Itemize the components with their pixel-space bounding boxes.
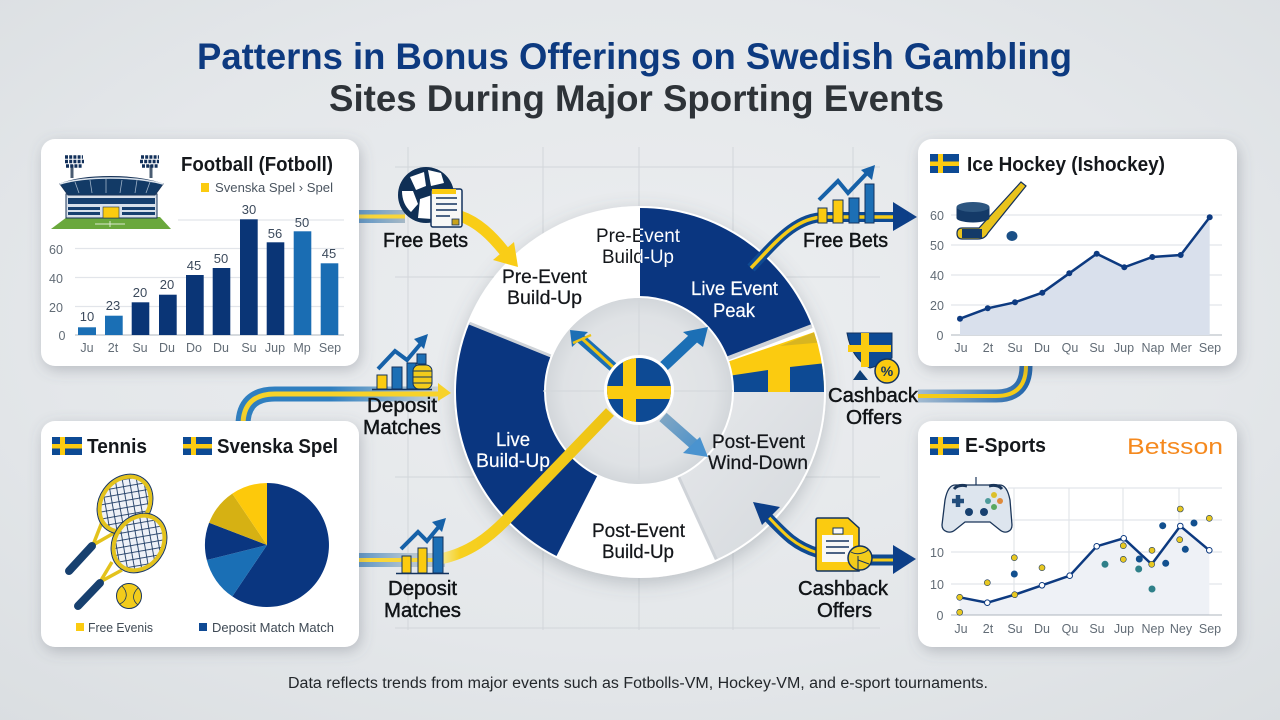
label: deposit matches (lower) [384, 578, 461, 622]
label: pre-event build-up, left [502, 267, 588, 309]
title [197, 36, 1072, 119]
label: deposit matches (lower): Matches [384, 600, 461, 622]
panel: ice hockey [918, 139, 1237, 366]
heading: tennis: Tennis [87, 436, 147, 458]
label: post-event build-up [592, 521, 686, 563]
line and scatter chart: e-sports: Nep [1142, 622, 1165, 636]
bar chart: football: Mp [293, 341, 311, 355]
line and scatter chart: e-sports: Sep [1199, 622, 1221, 636]
bar chart: football: 0 [59, 329, 66, 343]
bar chart: football [49, 202, 344, 355]
ring labels [476, 226, 808, 563]
label: cashback offers [828, 385, 919, 429]
segment: post-event wind-down [678, 392, 824, 559]
flow: free bets (top left) [359, 167, 518, 267]
icon: document with ball [816, 518, 872, 571]
flow: free bets (top right) [751, 165, 917, 268]
inner hole [545, 297, 733, 485]
label: cashback offers: Cashback [828, 385, 919, 407]
line and scatter chart: e-sports: Jup [1114, 622, 1134, 636]
label: cashback offers (lower): Offers [817, 600, 872, 622]
panel: tennis and Svenska Spel [41, 421, 359, 647]
line chart: ice hockey [930, 209, 1222, 355]
line chart: ice hockey: 40 [930, 269, 944, 283]
bar chart: football: 60 [49, 243, 63, 257]
bar chart: football: 45 [187, 258, 201, 273]
title: Patterns in Bonus Offerings on Swedish Gambling [197, 36, 1072, 77]
label: pre-event build-up, split: Build-Up [602, 247, 674, 268]
icon: flag shield with percent badge [847, 333, 899, 383]
line chart: ice hockey: Mer [1170, 341, 1192, 355]
bar chart: football: 20 [49, 301, 63, 315]
arrow: hub to north-east [663, 327, 708, 367]
legend: deposit match: Deposit Match Match [212, 621, 334, 635]
line and scatter chart: e-sports: Qu [1062, 622, 1078, 636]
icon: stadium [51, 157, 171, 229]
label: live event peak: Peak [713, 301, 755, 322]
label: pre-event build-up, split: Pre-Event [596, 226, 681, 247]
line and scatter chart: e-sports: 0 [937, 609, 944, 623]
central cycle ring [454, 206, 830, 578]
label: post-event wind-down: Wind-Down [708, 453, 808, 474]
segment: post-event build-up [556, 474, 716, 576]
icon: flag [930, 437, 959, 455]
label: live build-up: Live [496, 430, 530, 451]
line chart: ice hockey: Nap [1142, 341, 1165, 355]
bar chart: football: Su [132, 341, 148, 355]
heading: ice hockey: Ice Hockey (Ishockey) [967, 154, 1165, 176]
bar chart: football: 56 [268, 226, 282, 241]
line and scatter chart: e-sports: Su [1089, 622, 1105, 636]
bar chart: football: 45 [322, 246, 336, 261]
icon: flag [183, 437, 212, 455]
line chart: ice hockey: Ju [954, 341, 968, 355]
flow: cashback offers (lower right) [753, 502, 916, 622]
segment: live event peak [640, 208, 812, 359]
bar chart: football: Du [213, 341, 229, 355]
line chart: ice hockey: 20 [930, 299, 944, 313]
line chart: ice hockey: Sep [1199, 341, 1221, 355]
bar chart: football: 20 [160, 277, 174, 292]
line chart: ice hockey: Jup [1114, 341, 1134, 355]
bar chart: football: Su [241, 341, 257, 355]
icon: rising bars [818, 165, 875, 223]
label: post-event build-up: Post-Event [592, 521, 686, 542]
label: pre-event build-up, left: Build-Up [507, 288, 582, 309]
flow: cashback offers (right middle) [828, 333, 1026, 429]
bar chart: football: Sep [319, 341, 341, 355]
line and scatter chart: e-sports: Ney [1170, 622, 1193, 636]
line chart: ice hockey: Du [1034, 341, 1050, 355]
pie chart: Svenska Spel [205, 483, 329, 607]
panel: football [41, 139, 359, 366]
title: Sites During Major Sporting Events [329, 78, 944, 119]
bar chart: football: 23 [106, 298, 120, 313]
legend: free events: Free Evenis [88, 621, 153, 635]
label: free bets: Free Bets [803, 230, 888, 252]
line chart: ice hockey: Su [1007, 341, 1023, 355]
segment: live build-up [456, 323, 598, 556]
label: live event peak: Live Event [691, 279, 779, 300]
bar chart: football: 40 [49, 272, 63, 286]
icon: flag shield with percent badge: % [881, 363, 894, 379]
label: pre-event build-up, split [596, 226, 681, 268]
bar chart: football: 2t [108, 341, 119, 355]
icon: bars and coins [372, 334, 432, 390]
line and scatter chart: e-sports: Du [1034, 622, 1050, 636]
line chart: ice hockey: 2t [983, 341, 994, 355]
label: cashback offers: Offers [846, 407, 902, 429]
icon: flag [52, 437, 82, 455]
label: free bets: Free Bets [383, 230, 468, 252]
hub: Swedish flag [604, 355, 674, 425]
label: post-event wind-down [708, 432, 808, 474]
line chart: ice hockey: 60 [930, 209, 944, 223]
label: deposit matches (lower): Deposit [388, 578, 457, 600]
label: deposit matches: Matches [363, 417, 441, 439]
bar chart: football: Du [159, 341, 175, 355]
logo: Betsson: Betsson [1127, 434, 1223, 459]
line chart: ice hockey: Su [1089, 341, 1105, 355]
heading: Svenska Spel: Svenska Spel [217, 436, 338, 458]
heading: football: Football (Fotboll) [181, 154, 333, 176]
bar chart: football: 50 [295, 215, 309, 230]
bar chart: football: Jup [265, 341, 285, 355]
label: deposit matches: Deposit [367, 395, 437, 417]
bar chart: football: 50 [214, 251, 228, 266]
icon: tennis rackets and ball [69, 463, 178, 608]
bar chart: football: 20 [133, 285, 147, 300]
footnote: Data reflects trends from major events such as Fotbolls-VM, Hockey-VM, and e-sport tournaments. [288, 675, 988, 692]
flow: deposit matches (yellow to hub) [359, 412, 610, 560]
bar chart: football: 30 [242, 202, 256, 217]
line and scatter chart: e-sports: Ju [954, 622, 968, 636]
segment: pre-event white [469, 208, 640, 358]
label: cashback offers (lower) [798, 578, 889, 622]
icon: football and document [398, 167, 462, 227]
icon: bars with rising arrow (lower left) [396, 518, 449, 574]
label: post-event wind-down: Post-Event [712, 432, 806, 453]
heading: e-sports: E-Sports [965, 435, 1046, 457]
label: live build-up: Build-Up [476, 451, 550, 472]
line chart: ice hockey: 50 [930, 239, 944, 253]
line chart: ice hockey: 0 [937, 329, 944, 343]
arrow: hub to south-east [663, 417, 708, 457]
line and scatter chart: e-sports: Su [1007, 622, 1023, 636]
line and scatter chart: e-sports: 10 [930, 578, 944, 592]
icon: game controller [942, 477, 1012, 532]
panel: e-sports [918, 421, 1237, 647]
bar chart: football: Ju [80, 341, 94, 355]
flow: deposit matches (left middle) [243, 334, 451, 439]
label: live build-up [476, 430, 550, 472]
segment: flag wedge [729, 332, 824, 392]
label: deposit matches [363, 395, 441, 439]
line and scatter chart: e-sports: 2t [983, 622, 994, 636]
icon: flag [930, 154, 959, 173]
line chart: ice hockey: Qu [1062, 341, 1078, 355]
line and scatter chart: e-sports [930, 488, 1222, 636]
label: pre-event build-up, left: Pre-Event [502, 267, 588, 288]
bar chart: football: Do [186, 341, 202, 355]
arrow: hub to north-west [570, 330, 613, 367]
label: post-event build-up: Build-Up [602, 542, 674, 563]
bar chart: football: 10 [80, 309, 94, 324]
label: cashback offers (lower): Cashback [798, 578, 889, 600]
line and scatter chart: e-sports: 10 [930, 546, 944, 560]
icon: hockey stick and puck [956, 182, 1026, 241]
legend: football: Svenska Spel › Spel [215, 180, 333, 195]
label: live event peak [691, 279, 779, 322]
